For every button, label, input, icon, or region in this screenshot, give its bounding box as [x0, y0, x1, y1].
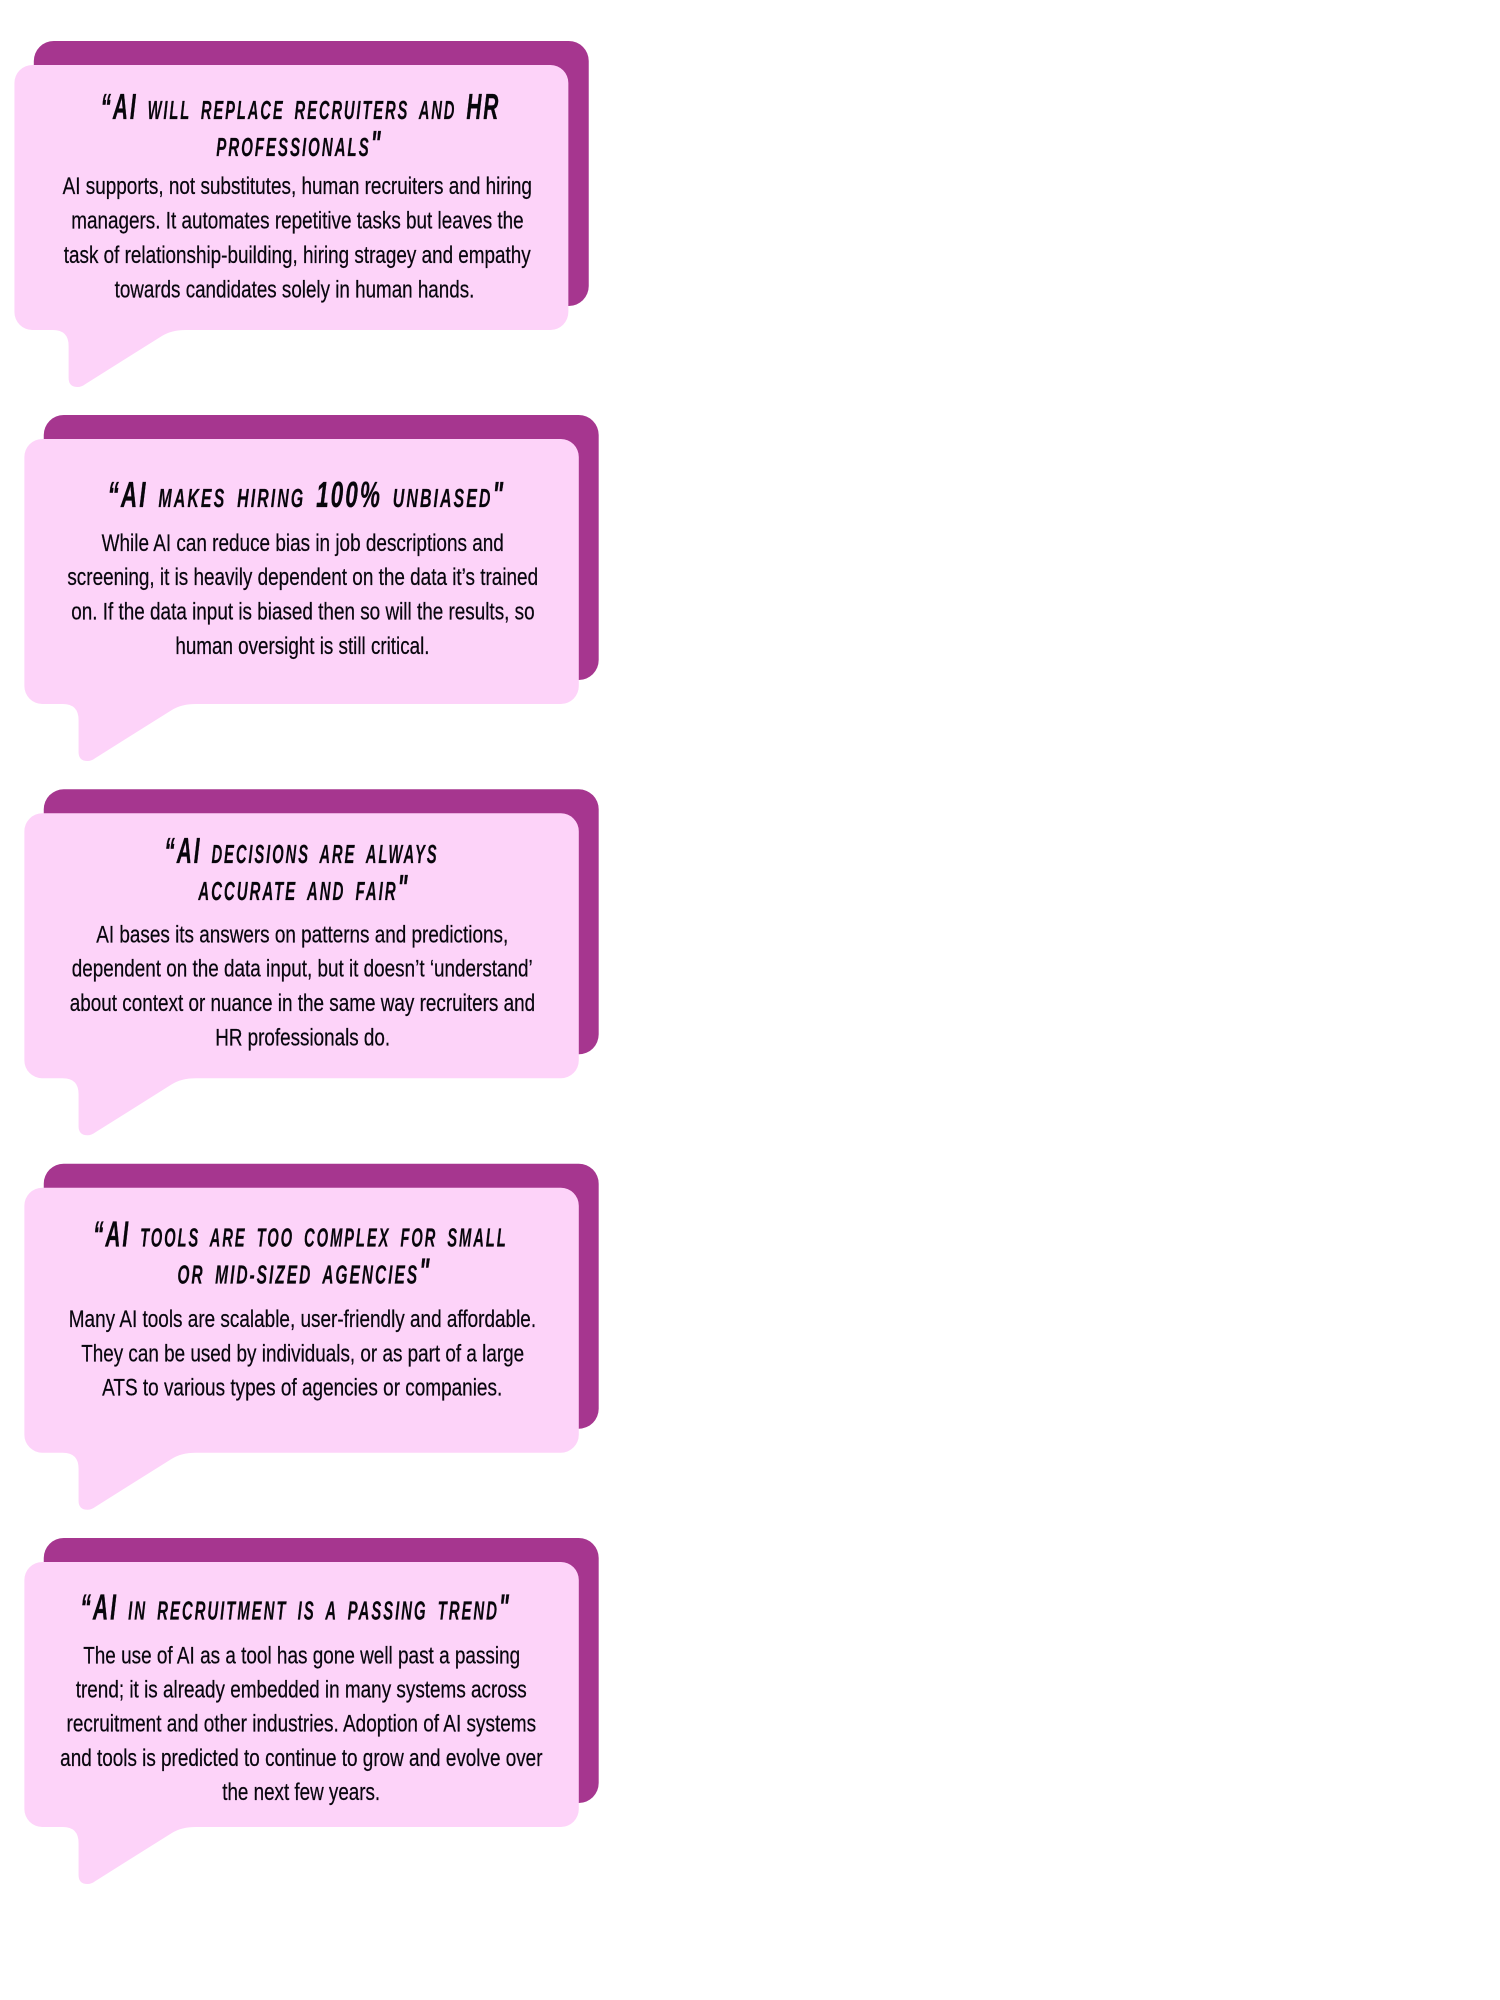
panel: myth 4 speech bubble: [24, 1164, 599, 1510]
heading 4: “AI TOOLS ARE TOO COMPLEX FOR SMALL: [93, 1214, 508, 1255]
body text 2: screening, it is heavily dependent on the data it’s trained: [67, 564, 538, 591]
shadow card 3: [44, 789, 599, 1054]
heading 2: “AI MAKES HIRING 100% UNBIASED": [108, 474, 505, 515]
body text 3: AI bases its answers on patterns and predictions,: [96, 921, 508, 948]
heading 1: “AI WILL REPLACE RECRUITERS AND HR: [101, 86, 500, 127]
body text 5: trend; it is already embedded in many systems across: [76, 1676, 527, 1703]
body text 4: [69, 1306, 536, 1401]
shadow card 2: [44, 415, 599, 680]
panel: myth 1 speech bubble: [14, 41, 589, 387]
heading 4: OR MID-SIZED AGENCIES": [177, 1251, 431, 1292]
body text 5: and tools is predicted to continue to grow and evolve over: [60, 1745, 543, 1772]
body text 1: [63, 173, 532, 303]
body text 2: on. If the data input is biased then so will the results, so: [71, 599, 535, 626]
body text 4: ATS to various types of agencies or companies.: [102, 1374, 502, 1401]
panel: myth 3 speech bubble: [24, 789, 599, 1135]
bubble 4: [24, 1188, 579, 1510]
panel: myth 2 speech bubble: [24, 415, 599, 761]
body text 3: dependent on the data input, but it doesn’t ‘understand’: [72, 956, 533, 983]
body text 5: recruitment and other industries. Adoption of AI systems: [67, 1711, 536, 1738]
bubble 1: [14, 65, 568, 387]
body text 3: HR professionals do.: [215, 1024, 390, 1051]
body text 2: While AI can reduce bias in job descriptions and: [102, 530, 504, 557]
body text 3: about context or nuance in the same way recruiters and: [70, 990, 535, 1017]
heading 3: ACCURATE AND FAIR": [198, 867, 410, 908]
heading 3: “AI DECISIONS ARE ALWAYS: [164, 830, 438, 871]
bubble 5: [24, 1562, 579, 1884]
body text 1: task of relationship-building, hiring stragey and empathy: [64, 242, 531, 269]
panel: myth 5 speech bubble: [24, 1538, 599, 1884]
body text 3: [70, 921, 535, 1051]
body text 2: human oversight is still critical.: [175, 633, 429, 660]
heading 1: PROFESSIONALS": [216, 123, 383, 164]
body text 5: the next few years.: [222, 1779, 380, 1806]
body text 2: [67, 530, 538, 660]
body text 5: The use of AI as a tool has gone well past a passing: [83, 1642, 520, 1669]
shadow card 5: [44, 1538, 599, 1803]
shadow card 4: [44, 1164, 599, 1429]
body text 4: Many AI tools are scalable, user-friendly and affordable.: [69, 1306, 536, 1333]
bubble 2: [24, 439, 579, 761]
heading 5: “AI IN RECRUITMENT IS A PASSING TREND": [80, 1586, 511, 1627]
body text 5: [60, 1642, 543, 1806]
body text 1: towards candidates solely in human hands.: [115, 276, 474, 303]
heading 1: [101, 86, 500, 164]
shadow card 1: [34, 41, 589, 306]
heading 3: [164, 830, 438, 908]
bubble 3: [24, 813, 579, 1135]
body text 4: They can be used by individuals, or as part of a large: [81, 1340, 524, 1367]
body text 1: AI supports, not substitutes, human recruiters and hiring: [63, 173, 532, 200]
heading 4: [93, 1214, 508, 1292]
body text 1: managers. It automates repetitive tasks but leaves the: [71, 207, 524, 234]
